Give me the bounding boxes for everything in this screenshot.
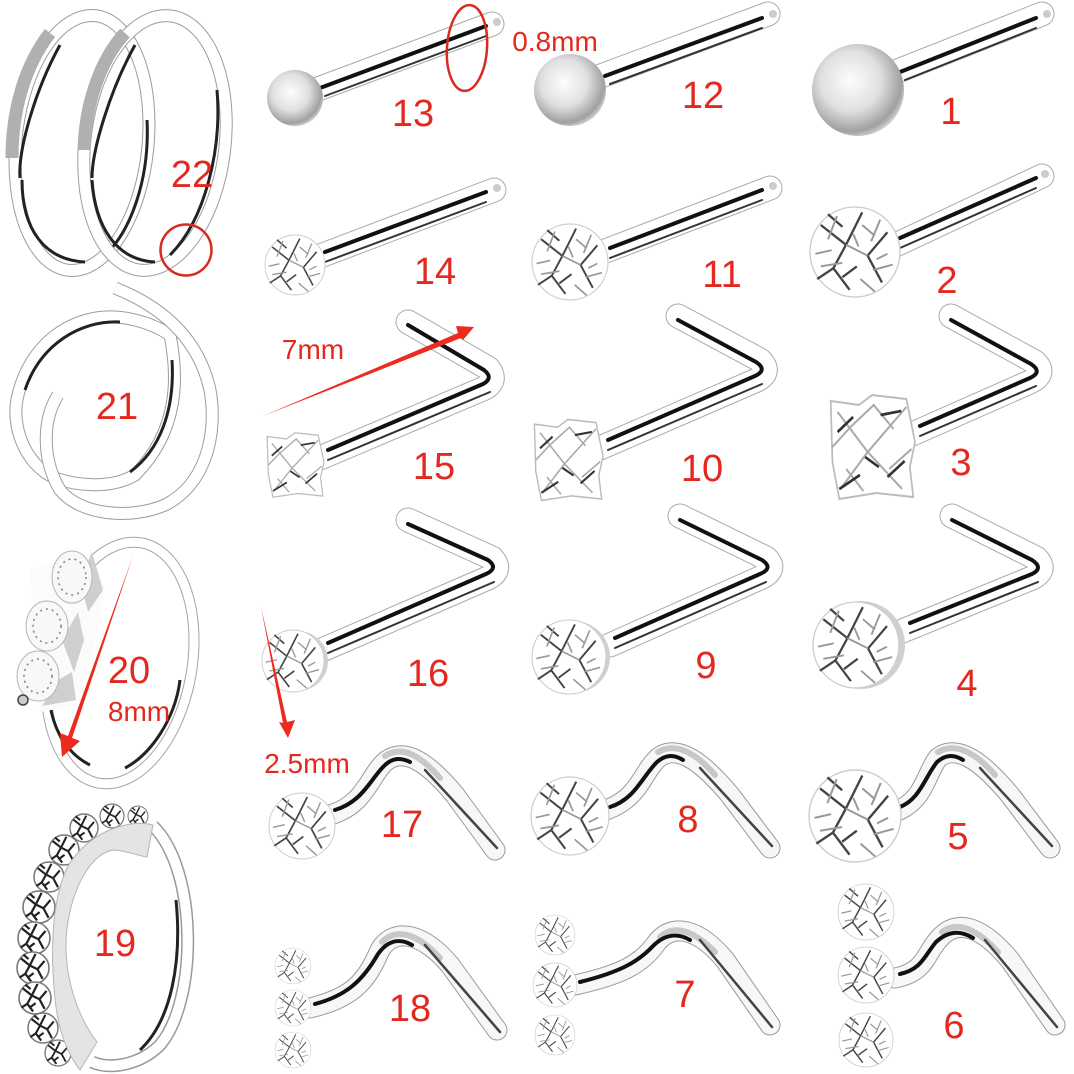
item numbers: 18 bbox=[389, 988, 431, 1030]
measurement labels bbox=[108, 26, 598, 779]
item numbers: 13 bbox=[392, 93, 434, 135]
pin 4 bbox=[813, 516, 1041, 689]
ring 21: double spiral bbox=[16, 288, 212, 513]
screw 17 bbox=[269, 752, 497, 859]
item numbers: 14 bbox=[414, 251, 456, 293]
band bbox=[53, 823, 153, 1070]
right hoop bbox=[70, 7, 240, 279]
item numbers: 20 bbox=[108, 650, 150, 692]
item numbers: 22 bbox=[171, 154, 213, 196]
measurement labels: 7mm bbox=[282, 334, 344, 365]
arrow: 8mm diameter bbox=[60, 556, 133, 757]
item numbers: 1 bbox=[940, 91, 962, 133]
arrow: 7mm length bbox=[263, 326, 474, 416]
pin 11 bbox=[532, 182, 777, 300]
item numbers: 8 bbox=[677, 799, 699, 841]
pin 2 bbox=[810, 170, 1049, 297]
item numbers: 12 bbox=[682, 75, 724, 117]
pin 14 bbox=[265, 184, 501, 295]
item numbers: 21 bbox=[96, 386, 138, 428]
ring 20: three-stone hoop bbox=[17, 530, 212, 796]
ring 19: pave half hoop bbox=[17, 804, 188, 1070]
stones bbox=[17, 551, 92, 701]
item numbers: 15 bbox=[413, 446, 455, 488]
pin 15 bbox=[267, 322, 492, 497]
measurement labels: 8mm bbox=[108, 696, 170, 727]
callout: oval marking post width bbox=[444, 4, 490, 92]
screw 6 bbox=[838, 884, 1057, 1067]
screw 8 bbox=[531, 748, 772, 855]
pin 13 bbox=[267, 18, 501, 126]
measurement labels: 2.5mm bbox=[264, 748, 350, 779]
pin 16 bbox=[262, 520, 497, 692]
item numbers: 6 bbox=[943, 1005, 965, 1047]
item numbers: 17 bbox=[381, 804, 423, 846]
item numbers: 7 bbox=[674, 974, 696, 1016]
measurement labels: 0.8mm bbox=[512, 26, 598, 57]
arrow: 2.5mm stone size bbox=[261, 607, 295, 738]
pin 1 bbox=[812, 10, 1051, 136]
item numbers: 4 bbox=[956, 663, 978, 705]
ring 22: double hoops bbox=[3, 7, 240, 279]
pin 9 bbox=[532, 516, 771, 694]
item numbers: 3 bbox=[950, 442, 972, 484]
item numbers: 10 bbox=[681, 448, 723, 490]
left hoop bbox=[3, 9, 161, 277]
item numbers: 5 bbox=[947, 816, 969, 858]
pin 12 bbox=[534, 10, 777, 126]
screw 5 bbox=[809, 748, 1052, 862]
screw 7 bbox=[533, 915, 772, 1055]
item numbers: 11 bbox=[702, 254, 742, 296]
item numbers: 16 bbox=[407, 653, 449, 695]
pin 10 bbox=[534, 316, 765, 501]
item numbers: 2 bbox=[936, 260, 958, 302]
pin 3 bbox=[831, 316, 1040, 499]
pave stones bbox=[128, 806, 148, 826]
band bbox=[30, 552, 106, 712]
item numbers: 9 bbox=[695, 645, 717, 687]
screw 18 bbox=[275, 934, 500, 1068]
item numbers bbox=[94, 75, 978, 1047]
callout: circle marking hoop thickness bbox=[160, 224, 212, 276]
item numbers: 19 bbox=[94, 923, 136, 965]
